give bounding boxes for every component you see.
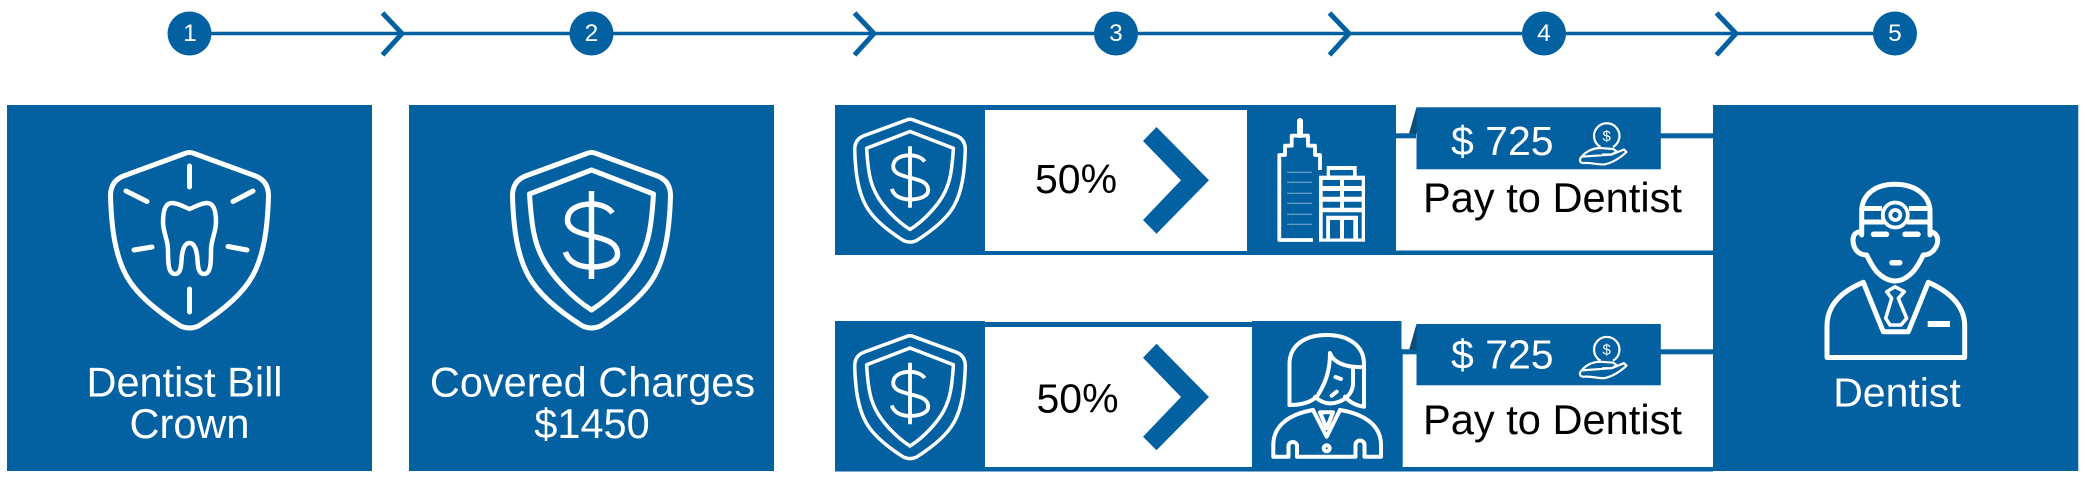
- arrow: step 3 to 4: [1330, 13, 1349, 55]
- step 5 marker: [1873, 12, 1917, 56]
- icon: hand with coin: $: [1603, 128, 1612, 145]
- step 4 marker: 4: [1537, 20, 1551, 47]
- connector: [1396, 133, 1416, 138]
- arrow: chevron: [1143, 344, 1209, 450]
- step 3 marker: 3: [1109, 20, 1123, 47]
- text: covered charges amount: [430, 358, 755, 447]
- arrow: step 2 to 3: [854, 13, 874, 55]
- text: amount: $ 725: [1451, 331, 1554, 377]
- arrow: step 1 to 2: [382, 13, 402, 55]
- icon: hand with coin: [1580, 337, 1626, 378]
- icon: shield with dollar: [512, 152, 670, 328]
- text: 50 percent: 50%: [1035, 156, 1117, 202]
- panel: insurer payment row: [835, 105, 1713, 255]
- panel: dentist: [1713, 105, 2078, 471]
- tag: insurer amount: [1409, 107, 1713, 221]
- step 2 marker: [570, 12, 614, 56]
- step 1 marker: [168, 12, 212, 56]
- step 3 marker: [1094, 12, 1138, 56]
- text: 50 percent: 50%: [1036, 376, 1119, 422]
- process timeline: [168, 12, 1917, 56]
- icon: patient woman: [1273, 335, 1381, 457]
- icon: shield with dollar: [855, 336, 965, 459]
- icon: shield with dollar: [855, 119, 965, 242]
- step 1 marker: 1: [183, 20, 197, 47]
- text: covered charges amount: Covered Charges: [430, 358, 755, 406]
- tag: patient amount: [1409, 324, 1713, 443]
- text: pay to dentist: Pay to Dentist: [1423, 396, 1682, 443]
- panel: covered charges: [409, 105, 774, 471]
- icon: hand with coin: $: [1603, 342, 1612, 359]
- step 4 marker: [1522, 12, 1566, 56]
- text: dentist bill crown: Crown: [130, 400, 249, 447]
- icon: insurance company building: [1279, 121, 1365, 242]
- icon: shield with tooth: [110, 152, 268, 328]
- arrow: chevron: [1143, 127, 1209, 234]
- step 2 marker: 2: [585, 20, 598, 47]
- text: amount: $ 725: [1451, 118, 1554, 164]
- text: dentist: Dentist: [1833, 370, 1961, 416]
- step 5 marker: 5: [1888, 20, 1902, 47]
- icon: dentist with head mirror: [1827, 184, 1965, 358]
- panel: patient payment row: [835, 321, 1713, 472]
- panel: dentist bill: [7, 105, 372, 471]
- text: covered charges amount: $1450: [534, 400, 650, 447]
- connector: [1401, 349, 1417, 354]
- arrow: step 4 to 5: [1716, 13, 1736, 55]
- icon: hand with coin: [1580, 123, 1626, 164]
- text: dentist bill crown: [86, 358, 283, 447]
- text: dentist bill crown: Dentist Bill: [86, 358, 283, 406]
- text: pay to dentist: Pay to Dentist: [1423, 174, 1682, 221]
